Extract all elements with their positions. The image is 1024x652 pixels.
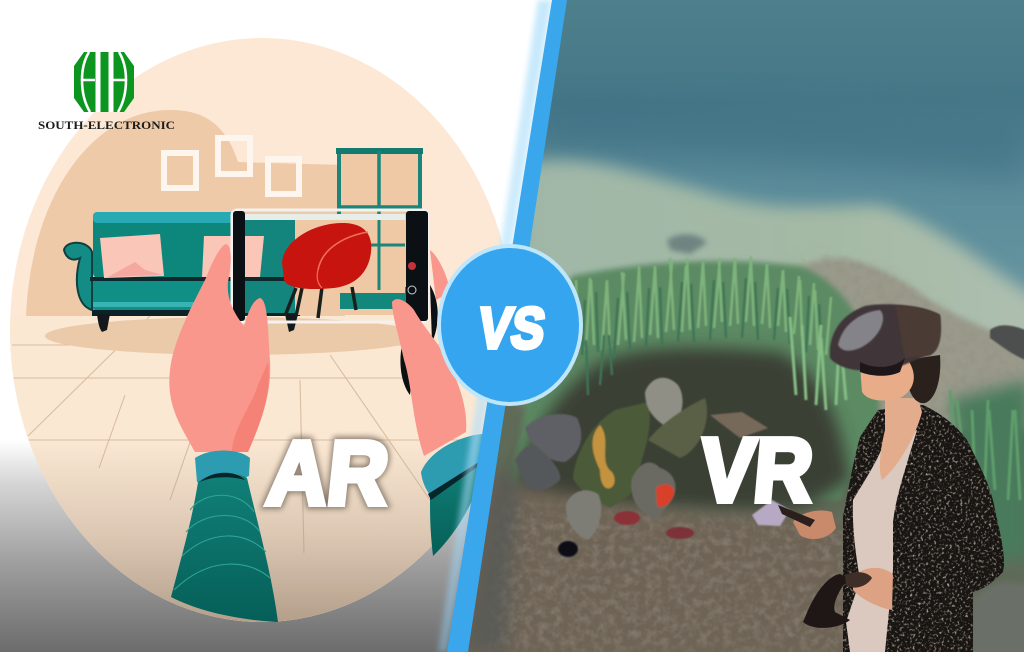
left hand [169,244,270,452]
red chair [282,223,371,318]
floor tile lines [12,316,459,553]
left sleeve [171,450,278,622]
panel: VR side [440,0,1024,652]
rug shadow [45,317,425,355]
circle fade [39,464,432,622]
rocky hill [780,258,1024,430]
logo: South-Electronic [38,52,175,132]
label: AR: AR [263,423,393,524]
face [860,360,914,400]
logo mark [74,52,134,112]
VS badge [439,246,581,404]
neck and chest [880,398,922,480]
phone rear shadow [222,285,438,395]
hair [909,355,940,404]
bookcase [336,151,423,305]
headset [830,304,941,371]
label: VR: VR [696,420,817,521]
illustrated room circle [10,38,503,622]
grass and soil mound [510,261,880,500]
blue divider stripe [438,0,567,652]
shirt [846,430,917,652]
hand with controller [853,568,893,610]
wall shape [26,110,345,318]
pillows [100,234,164,278]
picture frames [164,138,299,194]
water background [542,0,1024,301]
sofa [64,212,300,332]
jacket [843,405,1004,652]
hand with phone [793,510,836,539]
panel: AR side [0,38,503,652]
VS badge: VS [474,296,549,361]
bezels [233,211,245,321]
ground [468,476,843,652]
woman with VR headset [778,304,1004,652]
right hand [392,250,466,456]
phone screen [232,210,428,322]
pale sand [520,160,1024,400]
lower right rock [970,582,1024,652]
right sleeve [421,434,482,556]
rocks pile [515,378,790,557]
floor [10,316,432,622]
label: AR: AR [263,423,393,524]
grass blades [576,256,1020,500]
logo wordmark: SOUTH-ELECTRONIC [38,118,175,132]
